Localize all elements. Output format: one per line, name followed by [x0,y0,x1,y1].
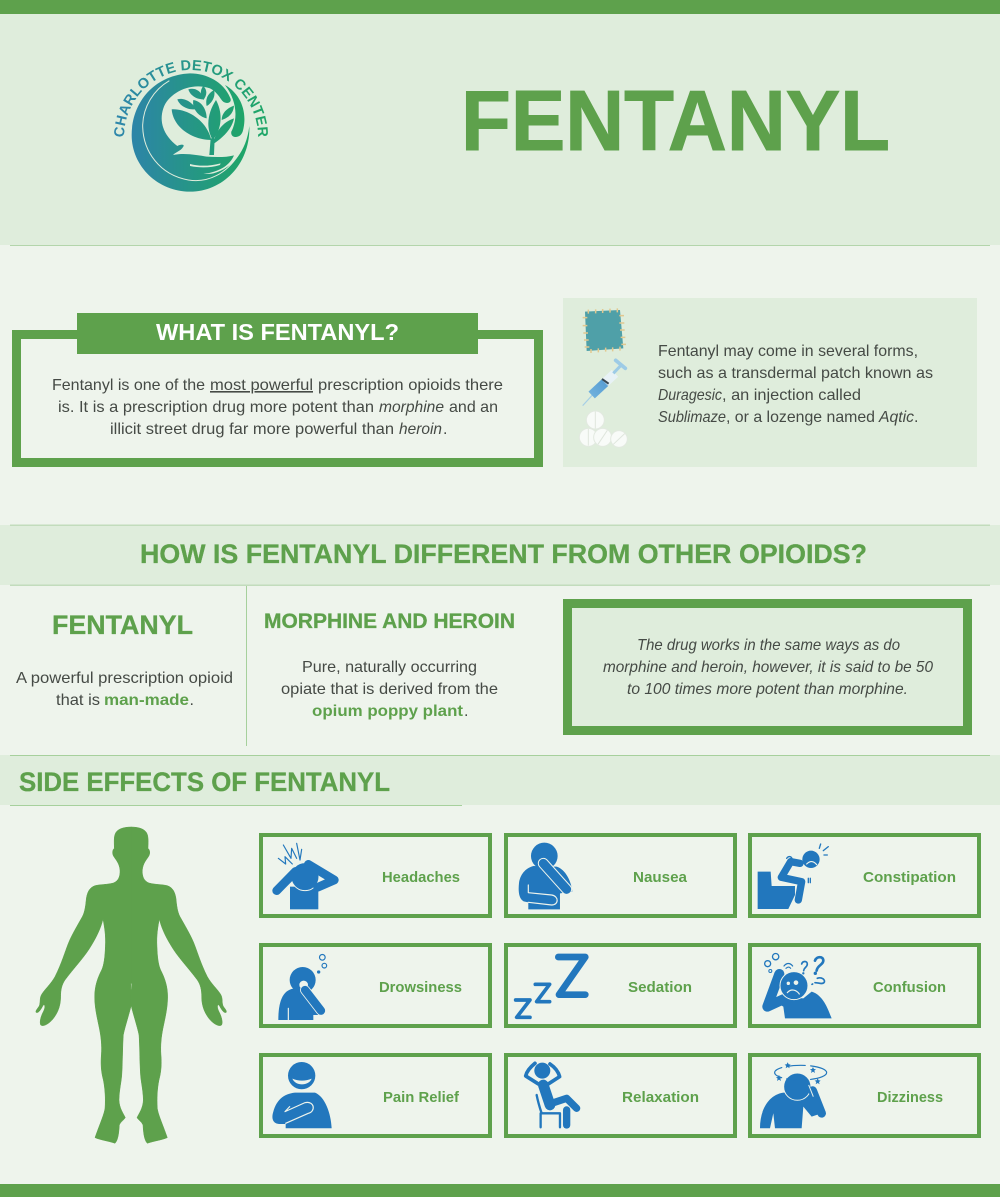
column: fentanyl [16,610,233,709]
column text: opium poppy plant [312,703,464,720]
card: pain relief [261,1055,490,1136]
panel body text: prescription opioids there [318,377,503,394]
card: confusion [750,945,979,1026]
icon: pain relief [272,1062,332,1128]
callout: potency: to 100 times more potent than morphine. [627,681,908,698]
panel body text: most powerful [210,377,313,394]
icon: constipation [758,844,828,909]
label: Pain Relief [383,1089,460,1106]
logo: Charlotte Detox Center [114,60,268,192]
icon: body silhouette [36,827,226,1143]
column heading: MORPHINE AND HEROIN [264,610,515,633]
label: Headaches [382,869,460,886]
label: Confusion [873,979,946,996]
card: constipation [750,835,979,916]
panel body text: morphine [379,399,444,416]
forms text: , or a lozenge named [726,409,875,426]
forms text: , an injection called [722,387,861,404]
panel body text [52,377,503,438]
bottom bar [0,1184,1000,1197]
icon: headache [277,843,334,909]
icon: pills [579,411,627,447]
icon: nausea [519,843,572,909]
column text: that is [56,692,100,709]
column text: . [464,703,468,720]
label: Relaxation [622,1089,699,1106]
logo wordmark: CHARLOTTE DETOX CENTER [114,60,268,137]
column text: . [190,692,194,709]
icon: syringe [583,360,625,406]
panel: forms of fentanyl [563,298,977,467]
callout: potency [568,604,968,730]
icon: relaxation [526,1063,577,1127]
icon: drowsiness [278,954,327,1020]
card: headaches [261,835,490,916]
card: nausea [506,835,735,916]
column text: Pure, naturally occurring [302,659,477,676]
label: Nausea [633,869,688,886]
section band: side effects [0,755,1000,806]
forms text: Duragesic [658,387,722,404]
panel body text: and an [449,399,498,416]
column text: man-made [104,692,189,709]
forms text: such as a transdermal patch known as [658,365,933,382]
icon: sedation zzz [516,957,585,1017]
forms text: Aqtic [878,409,914,426]
column text [281,659,498,720]
forms text [658,343,933,426]
column text: A powerful prescription opioid [16,670,233,687]
column: morphine and heroin [264,610,515,720]
label: Dizziness [877,1089,943,1106]
top bar [0,0,1000,14]
label: Constipation [863,869,956,886]
panel body text: illicit street drug far more powerful than [110,421,394,438]
section heading: HOW IS FENTANYL DIFFERENT FROM OTHER OPIOIDS? [140,539,867,569]
header band [0,14,1000,246]
panel frame [16,334,538,462]
section heading: SIDE EFFECTS OF FENTANYL [19,767,390,797]
panel body text: is. It is a prescription drug more potent than [58,399,374,416]
column heading: FENTANYL [52,610,193,640]
icon: confusion [765,953,832,1018]
panel body text: Fentanyl is one of the [52,377,205,394]
callout: potency: morphine and heroin, however, it is said to be 50 [603,659,933,676]
label: Drowsiness [379,979,462,996]
forms text: Sublimaze [658,409,726,426]
card: relaxation [506,1055,735,1136]
label: Sedation [628,979,692,996]
panel heading bar [77,313,478,354]
panel body text: . [443,421,447,438]
section band: how different [0,524,1000,586]
icon: transdermal patch [583,308,626,353]
panel body text: heroin [399,421,442,438]
callout: potency: The drug works in the same ways as do [637,637,900,654]
icon: dizziness [760,1062,827,1128]
card: drowsiness [261,945,490,1026]
panel heading: WHAT IS FENTANYL? [156,319,399,345]
card: dizziness [750,1055,979,1136]
forms text: Fentanyl may come in several forms, [658,343,918,360]
logo emblem [132,73,249,192]
column text [16,670,233,709]
column text: opiate that is derived from the [281,681,498,698]
forms text: . [914,409,918,426]
title: FENTANYL [461,74,890,169]
card: sedation [506,945,735,1026]
panel: what is fentanyl [16,313,538,462]
